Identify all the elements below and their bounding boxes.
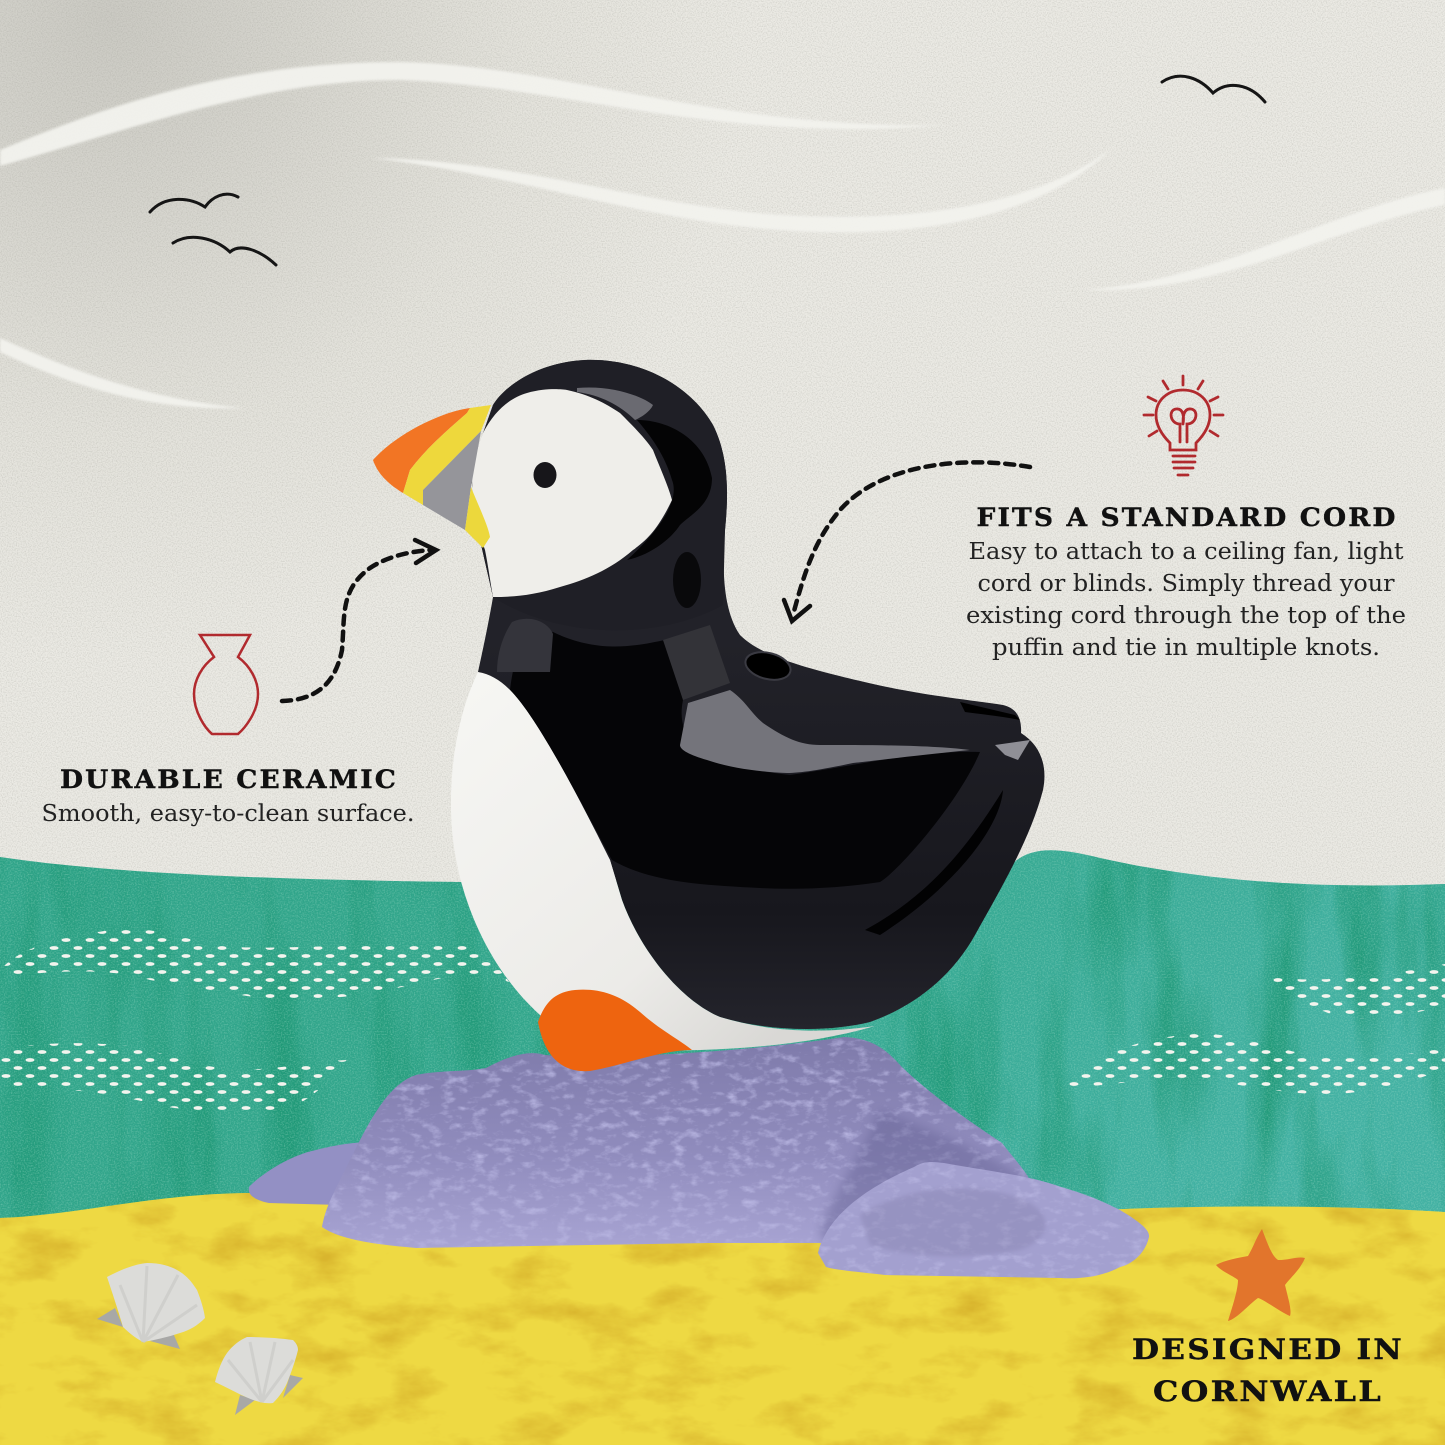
puffin cord hole — [743, 648, 793, 684]
arrow: ceramic to beak — [282, 540, 436, 701]
callout: designed in cornwall: CORNWALL — [1153, 1375, 1383, 1408]
callout: designed in cornwall: DESIGNED IN — [1132, 1333, 1404, 1366]
callout: designed in cornwall — [1132, 1333, 1404, 1408]
sea band — [0, 850, 1445, 1240]
sand band — [0, 1193, 1445, 1445]
puffin foot — [538, 990, 692, 1071]
callout: durable ceramic: Smooth, easy-to-clean surface. — [42, 801, 414, 827]
callout: fits a standard cord: cord or blinds. Simply thread your — [978, 571, 1395, 597]
icon: seashell 2 — [215, 1337, 303, 1415]
puffin lower beak yellow — [465, 487, 490, 548]
puffin grey wing sheen — [680, 690, 970, 773]
wave dots — [0, 928, 1445, 1113]
callout: durable ceramic — [42, 765, 414, 827]
puffin deep black body gloss — [510, 631, 980, 889]
puffin beak orange — [373, 408, 470, 493]
icon: vase — [194, 635, 258, 734]
puffin black back and wing — [470, 360, 1044, 1029]
callout: fits a standard cord: existing cord through the top of the — [966, 603, 1406, 629]
puffin white belly — [451, 672, 875, 1050]
puffin square patch — [663, 625, 730, 700]
rock — [249, 1037, 1149, 1278]
puffin beak grey — [423, 431, 481, 530]
puffin head shading — [470, 360, 727, 630]
puffin beak yellow band — [403, 405, 491, 505]
icon: light bulb — [1144, 376, 1223, 475]
icon: seagull right — [1162, 76, 1265, 102]
arrow: cord to hole — [784, 462, 1030, 621]
puffin neck patch and blotch — [497, 619, 553, 672]
puffin eye — [534, 462, 556, 488]
callout: durable ceramic: DURABLE CERAMIC — [60, 765, 398, 794]
puffin wing edge gloss — [865, 790, 1003, 935]
icon: seashell 1 — [97, 1263, 205, 1349]
callout: fits a standard cord — [966, 503, 1406, 661]
callout: fits a standard cord: Easy to attach to a ceiling fan, light — [968, 539, 1404, 565]
icon: seagulls left — [150, 194, 276, 265]
puffin white face — [472, 389, 672, 597]
puffin figurine — [373, 360, 1044, 1071]
icon: starfish — [1216, 1229, 1305, 1321]
callout: fits a standard cord: FITS A STANDARD CORD — [976, 503, 1398, 532]
callout: fits a standard cord: puffin and tie in multiple knots. — [992, 635, 1380, 661]
